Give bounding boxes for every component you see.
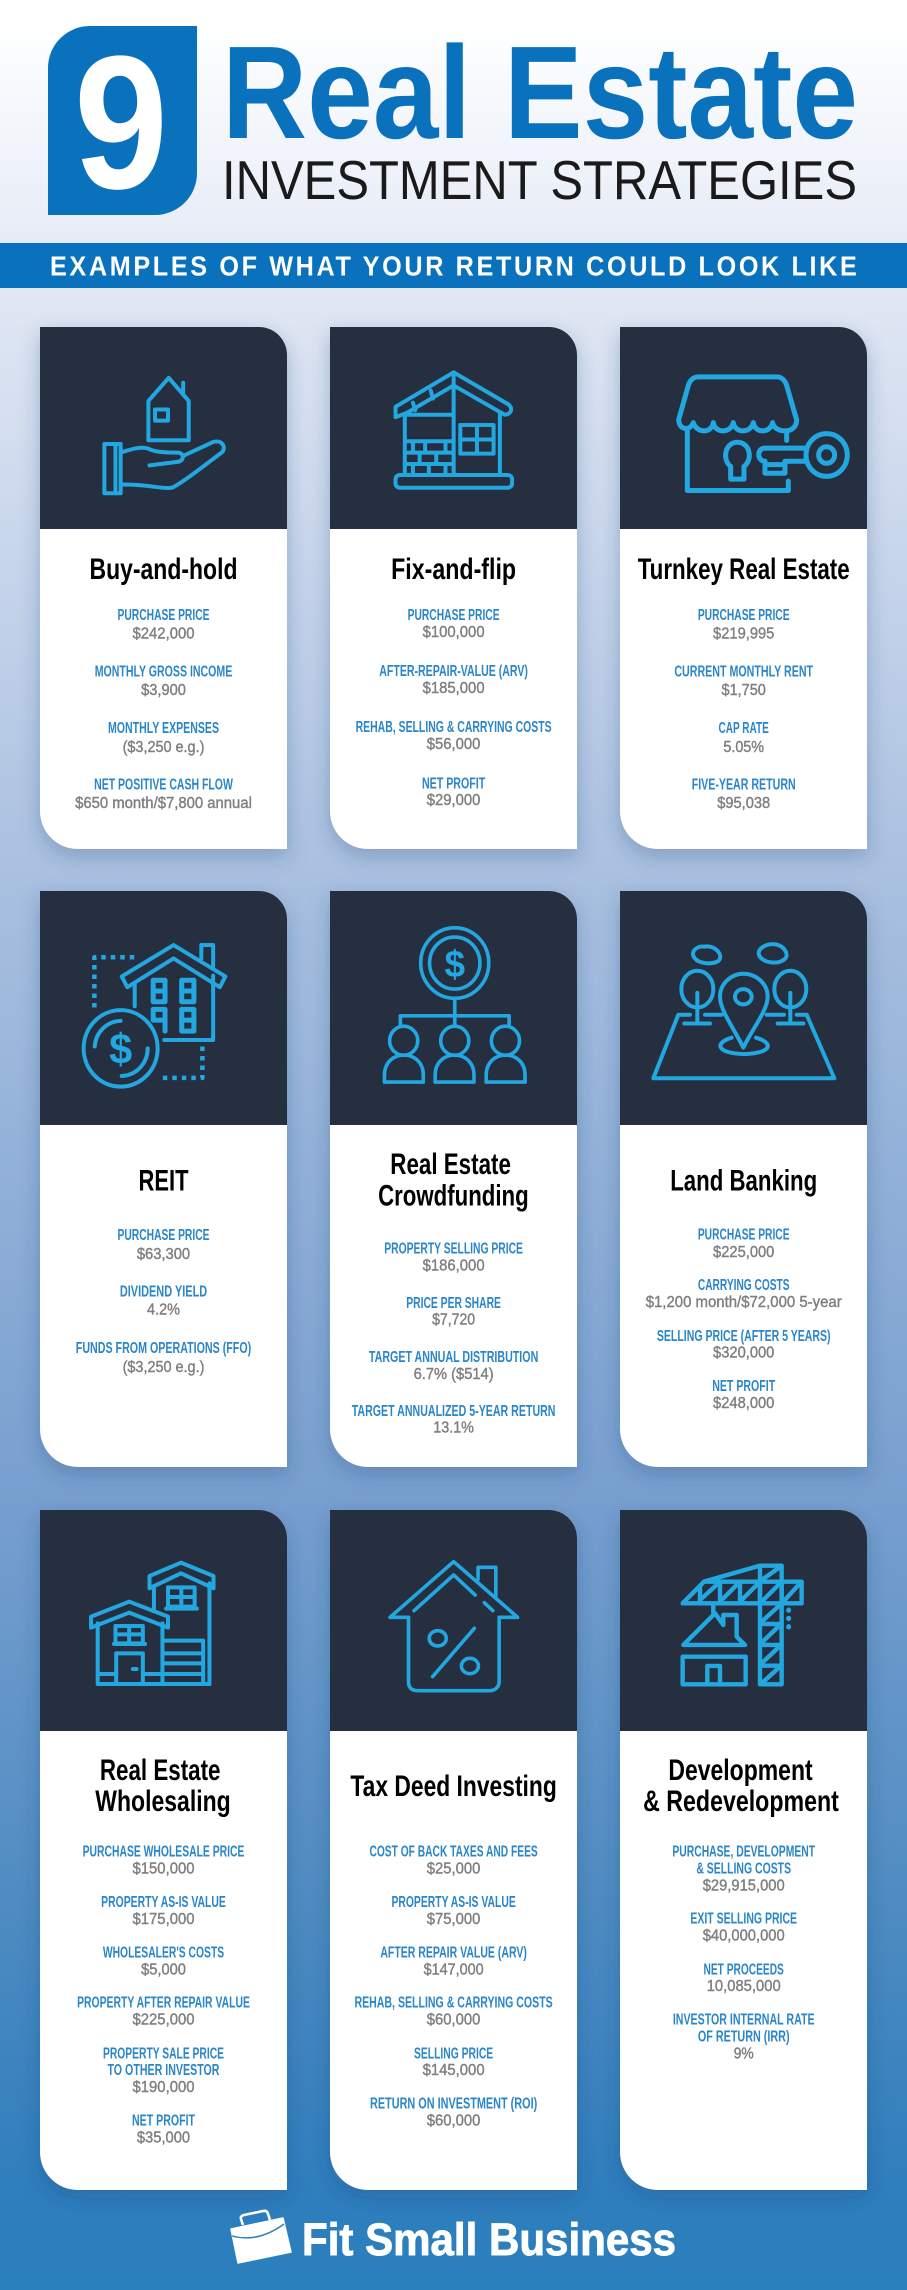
data list: $75,000: [427, 1911, 480, 1928]
icon: two houses: [91, 1563, 214, 1684]
heading: Tax Deed Investing: [350, 1770, 557, 1803]
data list: 10,085,000: [707, 1978, 781, 1995]
icon: briefcase: [231, 2211, 291, 2263]
data list: [356, 607, 552, 809]
data list: $185,000: [423, 680, 485, 697]
data list: 6.7% ($514): [414, 1366, 494, 1383]
data list: MONTHLY GROSS INCOME: [95, 663, 233, 680]
data list: CARRYING COSTS: [698, 1277, 790, 1294]
icon: house and coin: $: [109, 1025, 132, 1072]
data list: [352, 1240, 556, 1437]
heading: Real Estate: [100, 1754, 220, 1787]
data list: PURCHASE PRICE: [698, 607, 790, 624]
heading: [643, 1754, 839, 1818]
data list: PURCHASE PRICE: [408, 607, 500, 624]
data list: NET PROFIT: [132, 2113, 195, 2130]
heading: Buy-and-hold: [90, 553, 238, 586]
data list: [77, 1844, 250, 2146]
heading: & Redevelopment: [643, 1785, 839, 1818]
data list: PURCHASE, DEVELOPMENT: [672, 1844, 815, 1861]
icon: storefront and key: [679, 377, 847, 490]
data list: NET PROFIT: [422, 775, 485, 792]
data list: [672, 1844, 815, 2062]
data list: $248,000: [713, 1395, 774, 1412]
icon: coin and three investors: [384, 928, 525, 1082]
data list: REHAB, SELLING & CARRYING COSTS: [356, 719, 552, 736]
banner: examples: [0, 243, 907, 288]
data list: $35,000: [137, 2129, 190, 2146]
icon: crane and house: [683, 1566, 802, 1684]
heading: Development: [668, 1754, 813, 1787]
data list: PURCHASE PRICE: [118, 607, 210, 624]
wordmark: Fit Small Business: [302, 2214, 676, 2265]
icon: coin and three investors: $: [444, 943, 465, 985]
data list: FIVE-YEAR RETURN: [692, 776, 796, 793]
data list: OF RETURN (IRR): [698, 2029, 790, 2046]
panel: Land Banking: [620, 891, 867, 1467]
data list: PURCHASE WHOLESALE PRICE: [83, 1844, 245, 1861]
data list: PROPERTY AFTER REPAIR VALUE: [77, 1995, 250, 2012]
heading: [95, 1754, 231, 1818]
data list: [646, 1227, 842, 1412]
heading: Wholesaling: [95, 1785, 231, 1818]
data list: 5.05%: [723, 739, 764, 756]
heading: Land Banking: [670, 1164, 817, 1197]
data list: $25,000: [427, 1861, 480, 1878]
icon: land plot with pin: [653, 944, 834, 1078]
data list: WHOLESALER'S COSTS: [103, 1945, 224, 1962]
data list: NET PROCEEDS: [704, 1961, 784, 1978]
data list: TARGET ANNUALIZED 5-YEAR RETURN: [352, 1403, 556, 1420]
data list: ($3,250 e.g.): [123, 739, 204, 756]
data list: & SELLING COSTS: [696, 1861, 791, 1878]
data list: $190,000: [132, 2079, 194, 2096]
data list: $29,000: [427, 792, 480, 809]
panel: Development & Redevelopment: [620, 1510, 867, 2190]
data list: AFTER REPAIR VALUE (ARV): [380, 1945, 527, 1962]
data list: NET POSITIVE CASH FLOW: [94, 776, 233, 793]
data list: $1,200 month/$72,000 5-year: [646, 1294, 842, 1311]
icon: house with percent: [390, 1562, 518, 1691]
data list: $225,000: [132, 2012, 194, 2029]
data list: $95,038: [717, 795, 770, 812]
logo: Fit Small Business: [231, 2211, 676, 2265]
data list: 4.2%: [147, 1302, 180, 1319]
data list: [674, 607, 813, 812]
data list: PURCHASE PRICE: [698, 1227, 790, 1244]
icon: house in hand: [104, 378, 224, 493]
panel: Tax Deed Investing: [330, 1510, 577, 2190]
data list: [75, 607, 252, 812]
data list: PROPERTY SELLING PRICE: [384, 1240, 523, 1258]
data list: [76, 1227, 251, 1376]
data list: ($3,250 e.g.): [123, 1359, 204, 1376]
data list: $60,000: [427, 2012, 480, 2029]
panel: Turnkey Real Estate: [620, 327, 867, 849]
data list: RETURN ON INVESTMENT (ROI): [370, 2096, 537, 2113]
data list: TO OTHER INVESTOR: [108, 2062, 220, 2079]
panel: REIT: [40, 891, 287, 1467]
data list: FUNDS FROM OPERATIONS (FFO): [76, 1340, 251, 1357]
data list: MONTHLY EXPENSES: [108, 720, 219, 737]
data list: $7,720: [432, 1312, 475, 1329]
data list: $56,000: [427, 736, 480, 753]
data list: [354, 1844, 553, 2130]
data list: PROPERTY AS-IS VALUE: [391, 1894, 516, 1911]
panel: Real Estate Wholesaling: [40, 1510, 287, 2190]
data list: $60,000: [427, 2113, 480, 2130]
heading: Fix-and-flip: [391, 553, 516, 586]
data list: INVESTOR INTERNAL RATE: [673, 2012, 815, 2029]
data list: 9%: [734, 2045, 754, 2062]
data list: $5,000: [141, 1961, 186, 1978]
data list: $225,000: [713, 1244, 774, 1261]
data list: DIVIDEND YIELD: [120, 1283, 207, 1300]
icon: house under repair: [396, 372, 512, 488]
heading: Crowdfunding: [378, 1179, 529, 1212]
data list: $3,900: [141, 682, 186, 699]
data list: $175,000: [132, 1911, 194, 1928]
data list: CURRENT MONTHLY RENT: [674, 663, 813, 680]
title header: [48, 17, 858, 229]
data list: CAP RATE: [719, 720, 769, 737]
panel: Real Estate Crowdfunding: [330, 891, 577, 1467]
data list: 13.1%: [433, 1420, 474, 1437]
data list: $186,000: [423, 1258, 485, 1275]
panel: Fix-and-flip: [330, 327, 577, 849]
banner: examples: EXAMPLES OF WHAT YOUR RETURN COULD LOOK LIKE: [50, 251, 857, 282]
data list: REHAB, SELLING & CARRYING COSTS: [354, 1995, 553, 2012]
panel: Buy-and-hold: [40, 327, 287, 849]
data list: $242,000: [132, 626, 194, 642]
heading: REIT: [138, 1164, 188, 1197]
data list: AFTER-REPAIR-VALUE (ARV): [379, 663, 528, 680]
data list: $219,995: [713, 626, 774, 642]
data list: $150,000: [132, 1861, 194, 1878]
data list: $650 month/$7,800 annual: [75, 795, 252, 812]
data list: PROPERTY SALE PRICE: [103, 2045, 224, 2062]
data list: PROPERTY AS-IS VALUE: [101, 1894, 226, 1911]
data list: $100,000: [423, 624, 485, 641]
data list: $63,300: [137, 1246, 190, 1263]
data list: NET PROFIT: [712, 1378, 775, 1395]
data list: $40,000,000: [703, 1928, 785, 1945]
data list: $1,750: [722, 682, 766, 699]
data list: PURCHASE PRICE: [118, 1227, 210, 1244]
badge: number 9: 9: [74, 17, 168, 229]
data list: PRICE PER SHARE: [406, 1295, 501, 1312]
data list: SELLING PRICE: [414, 2045, 493, 2062]
data list: $147,000: [424, 1961, 484, 1978]
data list: $29,915,000: [703, 1877, 785, 1894]
data list: EXIT SELLING PRICE: [690, 1911, 797, 1928]
heading: Real Estate: [390, 1148, 511, 1181]
icon: house and coin: [84, 945, 225, 1087]
data list: $320,000: [713, 1345, 774, 1362]
heading: [378, 1148, 529, 1212]
data list: TARGET ANNUAL DISTRIBUTION: [369, 1349, 538, 1366]
data list: COST OF BACK TAXES AND FEES: [369, 1844, 538, 1861]
data list: $145,000: [423, 2062, 485, 2079]
